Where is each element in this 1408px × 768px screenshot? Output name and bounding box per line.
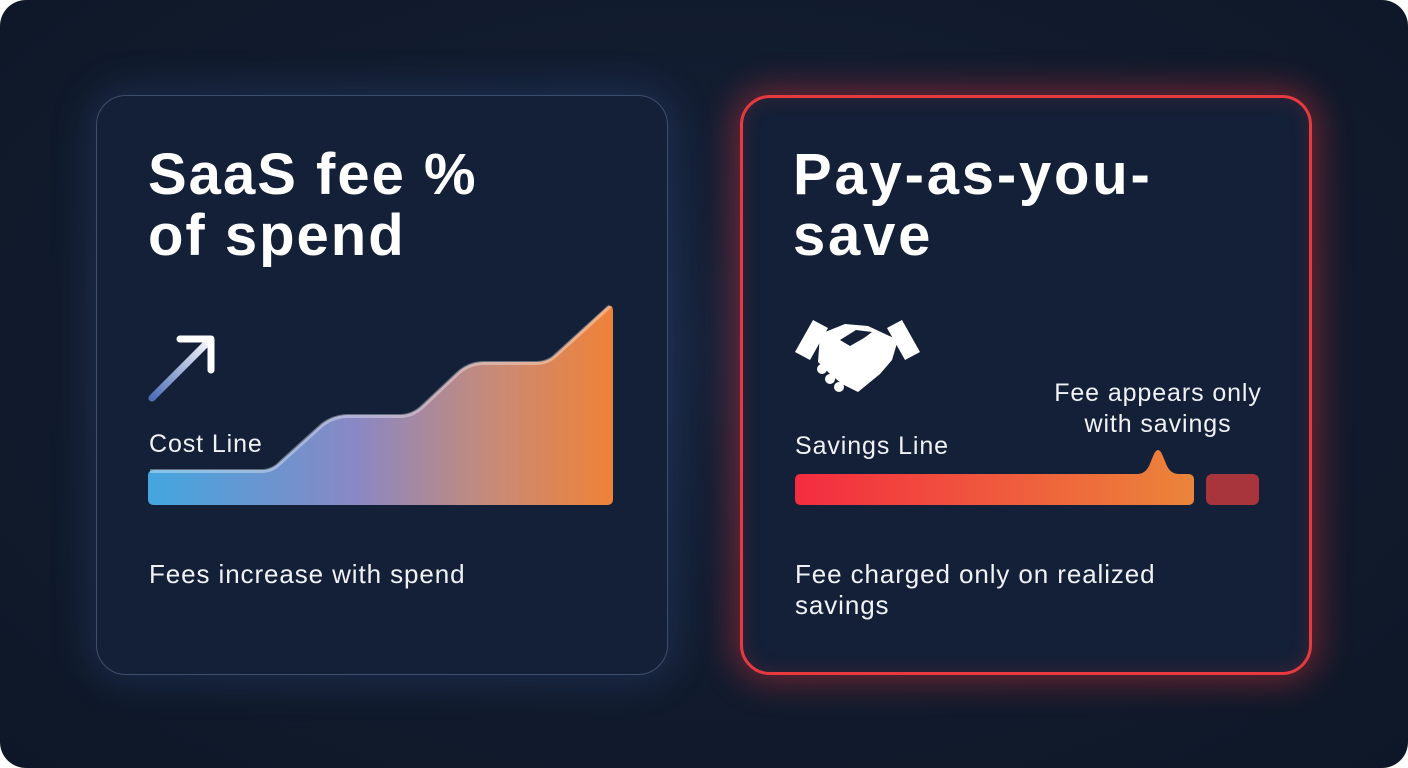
title: SaaS fee % of spend: SaaS fee % xyxy=(148,142,478,207)
callout: fee appears: Fee appears only xyxy=(1054,379,1262,407)
text: fee charged: Fee charged only on realized xyxy=(795,559,1156,589)
label: Cost Line: Cost Line xyxy=(149,430,263,458)
panel: SaaS fee xyxy=(96,95,668,675)
title: SaaS fee % of spend: of spend xyxy=(148,203,406,268)
icon: handshake xyxy=(795,320,920,392)
text: fees increase: Fees increase with spend xyxy=(149,559,465,589)
callout: fee appears: with savings xyxy=(1084,410,1231,438)
text: fee charged xyxy=(795,559,1156,620)
text: fee charged: savings xyxy=(795,590,889,620)
savings bar xyxy=(795,450,1259,505)
title: Pay-as-you-save: Pay-as-you- xyxy=(793,142,1153,207)
title: Pay-as-you-save xyxy=(793,142,1153,268)
title: SaaS fee % of spend xyxy=(148,142,478,268)
callout: fee appears xyxy=(1054,379,1262,438)
panel: pay-as-you-save xyxy=(740,95,1312,675)
icon: arrow up-right xyxy=(152,339,211,398)
label: Savings Line: Savings Line xyxy=(795,432,949,460)
title: Pay-as-you-save: save xyxy=(793,203,933,268)
